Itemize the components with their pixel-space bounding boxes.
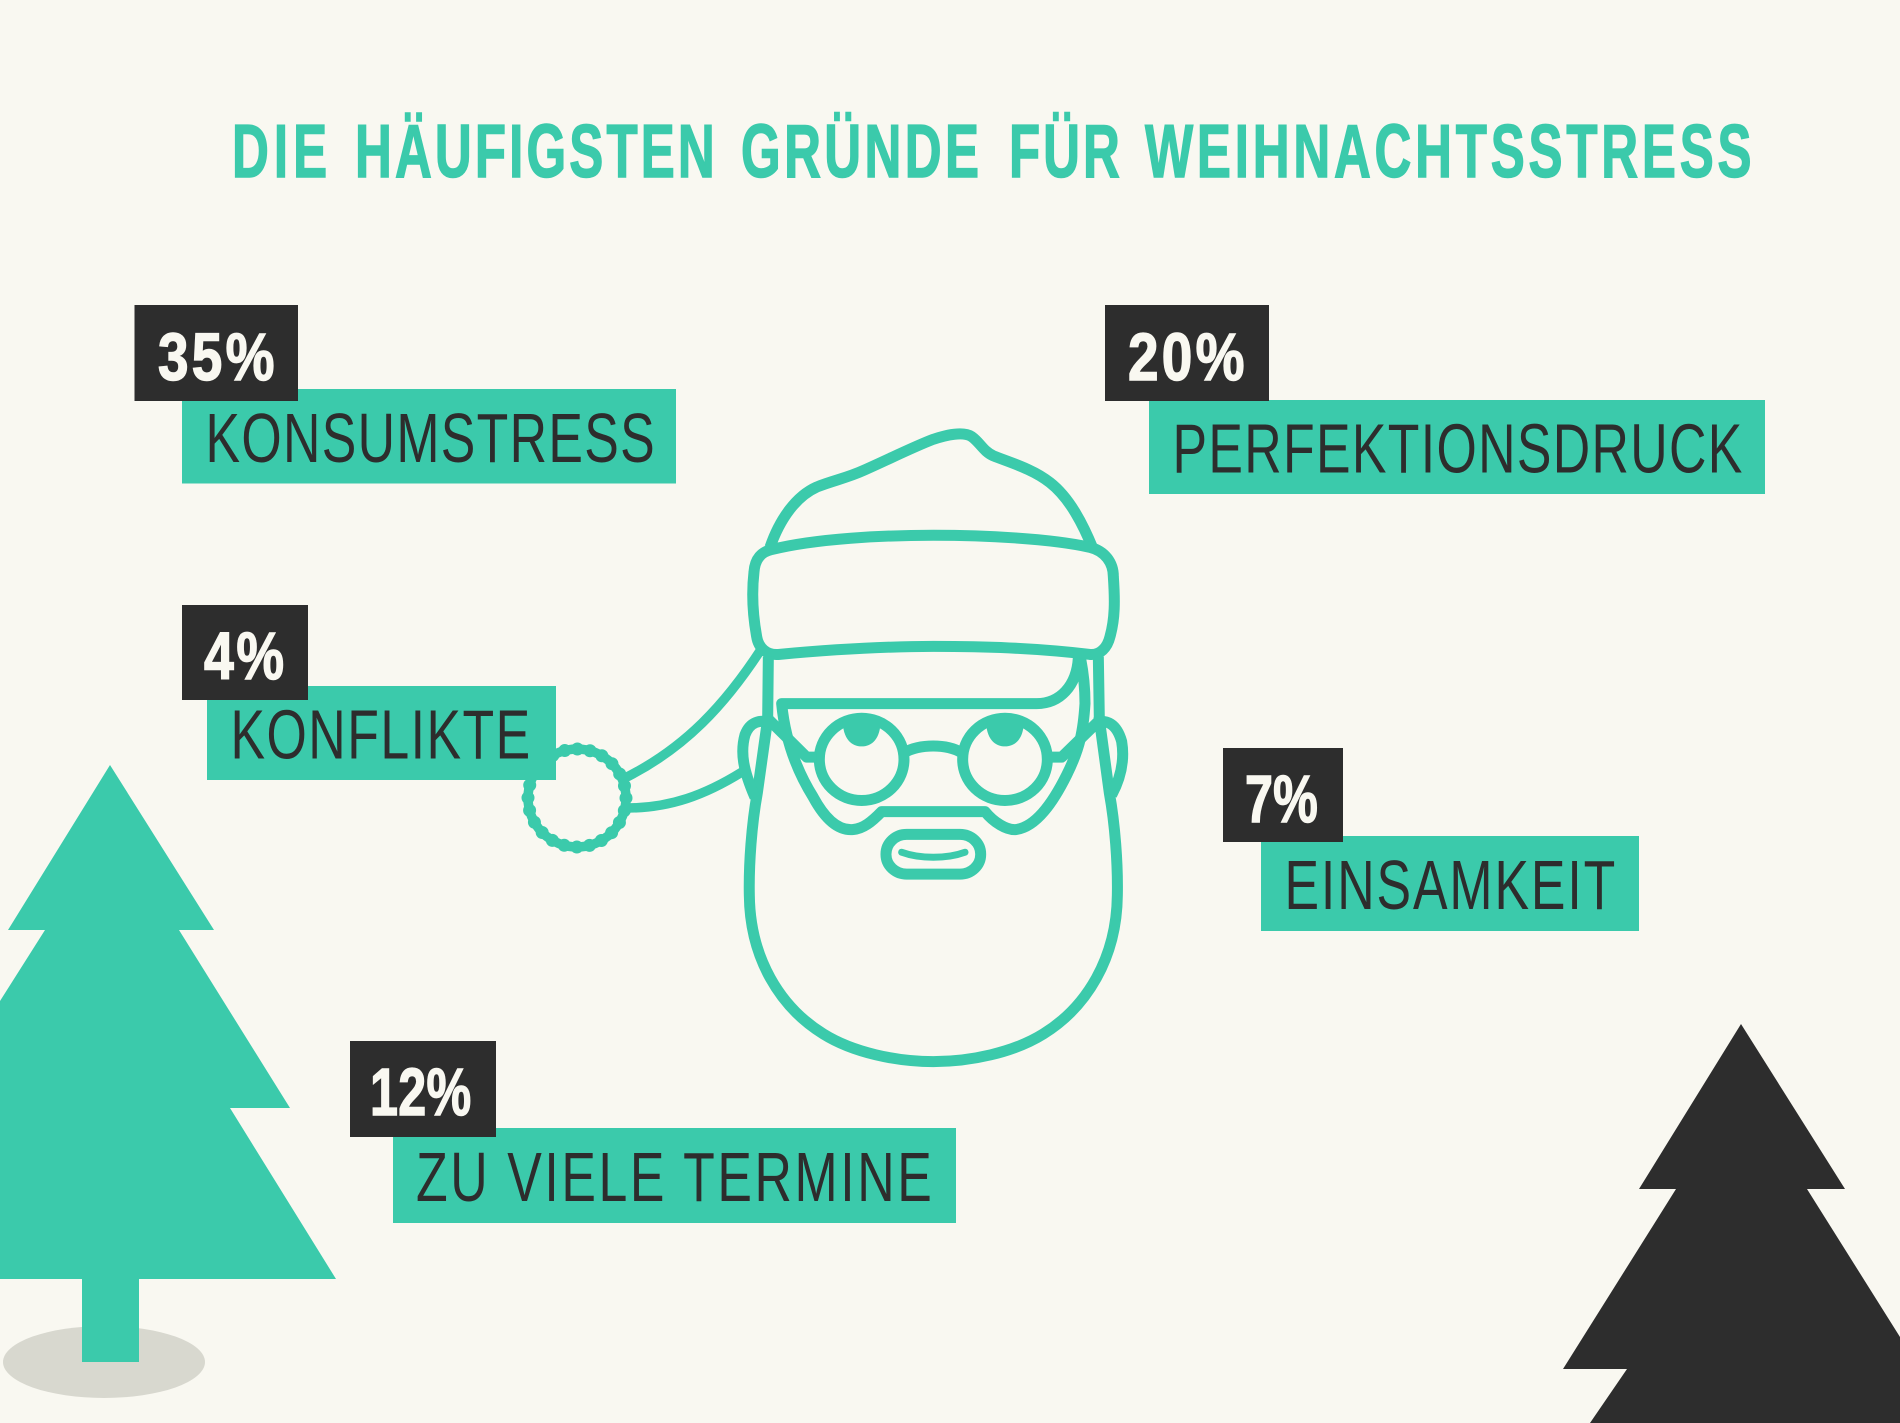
callout: 4% Konflikte [182,605,556,780]
callout: 20% Perfektionsdruck [1105,305,1765,494]
callout: 12% Zu viele Termine [350,1041,956,1223]
icon: santa hat tail and pom-pom [528,648,762,847]
hair fringe and face [782,658,1085,830]
callout: 4% Konflikte: 4% [204,618,284,693]
left ear [743,721,771,797]
callout: 7% Einsamkeit: EINSAMKEIT [1284,846,1615,925]
glasses [768,718,1098,800]
callout: 35% Konsumstress: KONSUMSTRESS [206,399,655,478]
hat band [753,535,1114,655]
callout: 35% Konsumstress: 35% [158,320,274,394]
callout: 12% Zu viele Termine: ZU VIELE TERMINE [416,1138,932,1217]
left pupil [843,720,881,746]
callout: 4% Konflikte: KONFLIKTE [230,696,530,774]
callout: 20% Perfektionsdruck: PERFEKTIONSDRUCK [1172,410,1742,488]
icon: green tree with shadow [0,765,336,1398]
callout: 7% Einsamkeit [1223,748,1639,931]
illustration: santa face [743,434,1123,1062]
mouth [886,834,981,874]
title: HÄUFIGSTEN [355,109,715,193]
title: FÜR [1009,109,1120,193]
icon: dark tree [1563,1024,1900,1423]
beard outline [749,657,1117,1062]
callout: 20% Perfektionsdruck: 20% [1128,320,1244,394]
smile [902,852,965,857]
callout: 12% Zu viele Termine: 12% [370,1054,471,1130]
hat top [770,434,1093,550]
callout: 7% Einsamkeit: 7% [1245,761,1318,837]
right ear [1095,721,1123,795]
right pupil [986,720,1024,746]
title [232,109,1752,193]
callout: 35% Konsumstress [134,305,676,484]
title: DIE [232,109,327,193]
title: WEIHNACHTSSTRESS [1145,109,1752,193]
title: GRÜNDE [741,109,979,193]
